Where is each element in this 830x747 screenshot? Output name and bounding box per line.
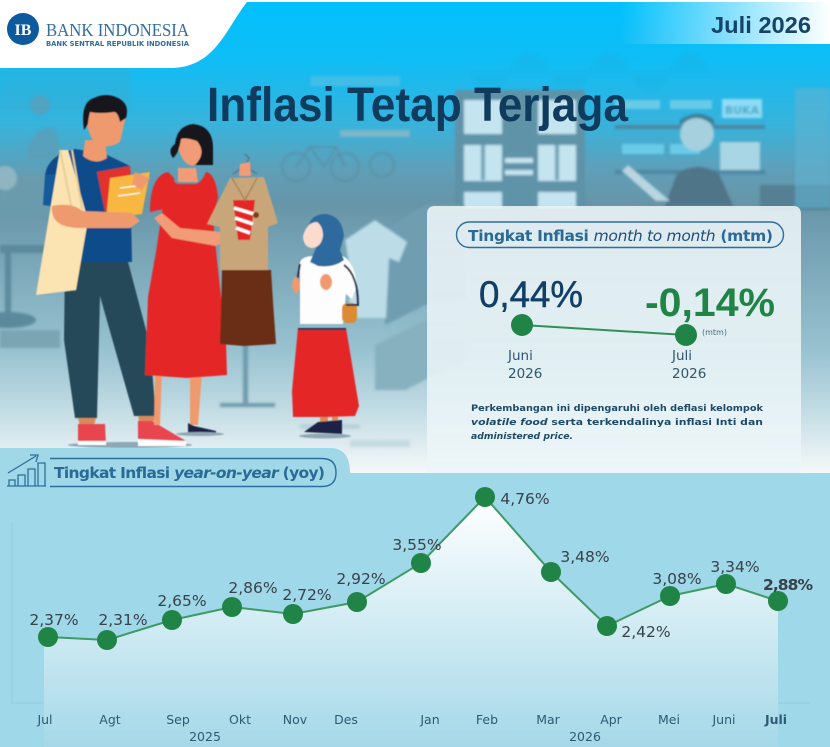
date strip: Juli 2026 — [711, 12, 811, 38]
background: shop scene — [0, 0, 830, 473]
yoy line chart: 3,55% — [392, 536, 442, 554]
mtm line chart: Juli — [671, 348, 692, 364]
mtm line chart: (mtm) — [702, 328, 727, 337]
mtm line chart: 0,44% — [479, 274, 583, 315]
yoy line chart: 2,37% — [29, 611, 79, 629]
yoy line chart: 2,72% — [282, 586, 332, 604]
mtm heading pill — [456, 222, 784, 248]
yoy line chart: 2,42% — [621, 623, 671, 641]
yoy heading pill: Tingkat Inflasi year-on-year (yoy) — [54, 464, 325, 482]
girl — [292, 214, 359, 438]
yoy heading pill — [50, 458, 336, 486]
yoy line chart: 2025 — [189, 729, 221, 744]
yoy line chart: 2,65% — [157, 592, 207, 610]
yoy line chart: Agt — [99, 712, 121, 727]
mtm line chart: 2026 — [672, 366, 706, 382]
date strip — [620, 2, 830, 44]
icon: rising bar chart — [7, 455, 46, 486]
mtm description: administered price. — [471, 432, 573, 442]
illustration: family shopping — [36, 95, 359, 448]
yoy line chart: Apr — [600, 712, 623, 727]
logo: Bank Indonesia: IB — [15, 22, 32, 39]
yoy line chart: 3,08% — [652, 570, 702, 588]
yoy line chart: Juli — [764, 712, 787, 727]
yoy line chart — [12, 487, 813, 747]
title: Inflasi Tetap Terjaga — [207, 79, 628, 132]
mtm line chart: -0,14% — [645, 281, 775, 325]
logo panel — [0, 0, 830, 68]
yoy line chart: Okt — [229, 712, 251, 727]
yoy line chart: 2026 — [569, 729, 601, 744]
yoy line chart: Jul — [36, 712, 53, 727]
yoy line chart: Des — [334, 712, 358, 727]
yoy line chart: 2,88% — [763, 576, 813, 594]
yoy line chart: 3,34% — [710, 558, 760, 576]
yoy line chart: 3,48% — [560, 548, 610, 566]
woman — [145, 124, 227, 436]
background: shop scene: BUKA — [725, 104, 760, 117]
mtm line chart: 2026 — [508, 366, 542, 382]
mtm description: volatile food serta terkendalinya inflasi Inti dan — [471, 418, 763, 428]
logo: Bank Indonesia: BANK SENTRAL REPUBLIK INDONESIA — [46, 40, 190, 48]
yoy line chart: 2,92% — [336, 570, 386, 588]
yoy line chart: Mei — [658, 712, 680, 727]
panel: year-on-year inflation — [0, 448, 830, 747]
yoy line chart: 2,31% — [98, 611, 148, 629]
mtm heading pill: Tingkat Inflasi month to month (mtm) — [468, 227, 773, 245]
yoy line chart: Feb — [476, 712, 498, 727]
mtm description — [471, 404, 764, 442]
hanger with scout uniform — [207, 154, 278, 346]
panel: month to month inflation — [427, 206, 801, 473]
yoy line chart: Nov — [283, 712, 308, 727]
mtm description: Perkembangan ini dipengaruhi oleh deflasi kelompok — [471, 404, 764, 414]
yoy line chart: Juni — [711, 712, 736, 727]
logo: Bank Indonesia: BANK INDONESIA — [46, 20, 189, 40]
logo: Bank Indonesia — [7, 13, 190, 48]
man — [36, 95, 192, 448]
mtm line chart — [479, 274, 775, 382]
yoy line chart: Sep — [166, 712, 190, 727]
yoy line chart: 4,76% — [500, 490, 550, 508]
mtm line chart: Juni — [507, 348, 533, 364]
yoy line chart: 2,86% — [228, 579, 278, 597]
yoy line chart: Jan — [419, 712, 440, 727]
yoy line chart: Mar — [536, 712, 561, 727]
